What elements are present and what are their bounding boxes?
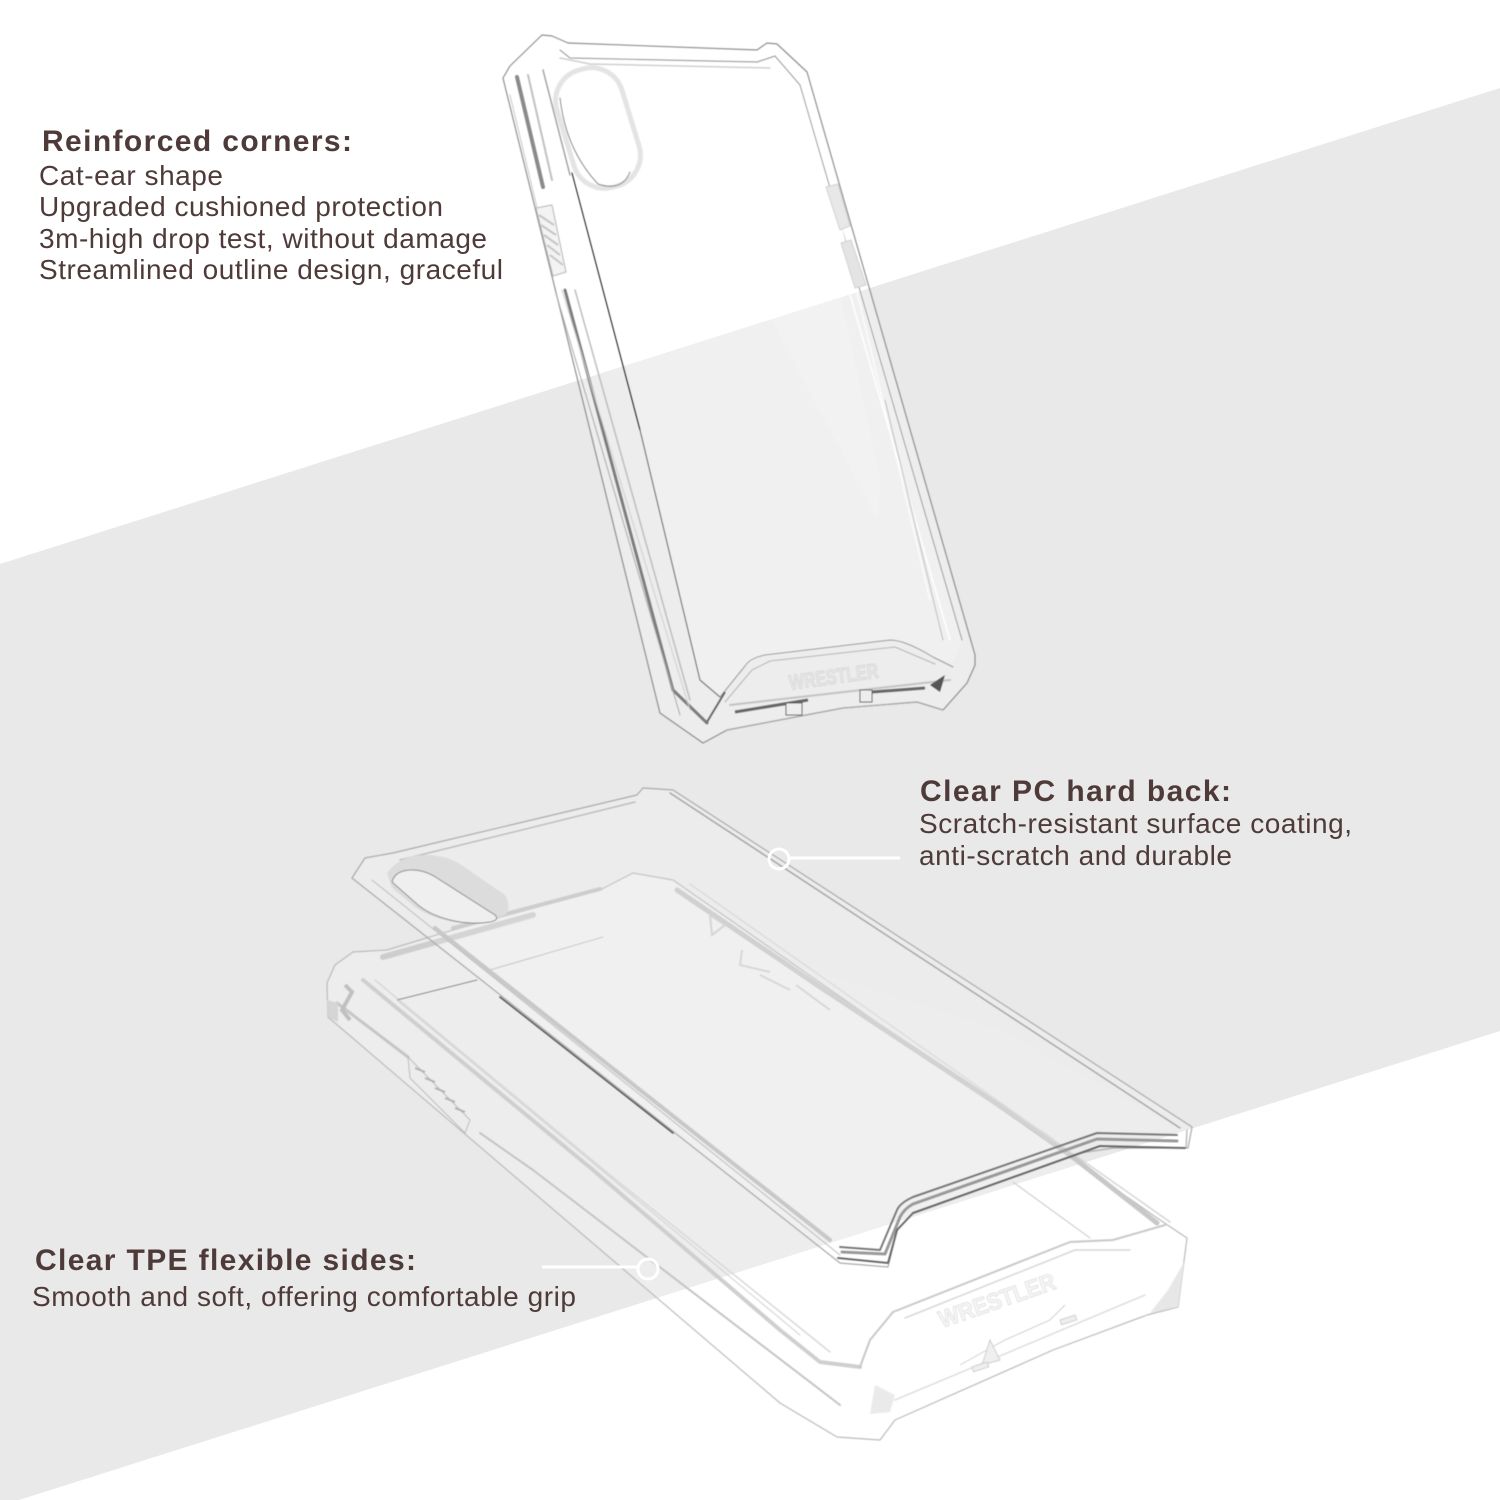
side buttons [536,184,866,288]
top rail and side rails [337,884,1170,1405]
frame outline [327,873,1187,1440]
feature list [39,160,503,285]
clear PC hard back: exploded upper layer [352,788,1192,1267]
side rails [510,50,962,730]
diagonal reflection [770,295,880,520]
heading: Reinforced corners: [42,125,352,158]
bottom ports [960,1305,1077,1372]
case body outline [503,35,975,743]
description: anti-scratch and durable [919,840,1232,871]
notch bands [838,1133,1185,1263]
callout: reinforced corners [39,125,503,285]
back panel [352,788,1192,1267]
callout: clear PC hard back [919,775,1352,871]
phone case: assembled top view [503,35,975,743]
camera cutout [548,60,648,196]
description: Scratch-resistant surface coating, [919,808,1352,839]
description [919,808,1352,871]
callout: clear TPE flexible sides [32,1244,576,1312]
surface sheen [500,880,1180,1250]
ridged side button [408,1057,470,1133]
heading: Clear TPE flexible sides: [35,1244,416,1277]
flexible TPE frame: exploded lower layer [327,873,1187,1440]
feature list: Streamlined outline design, graceful [39,254,503,285]
feature list: Upgraded cushioned protection [39,191,443,222]
feature list: 3m-high drop test, without damage [39,223,487,254]
embossed brand: WRESTLER [935,1268,1059,1334]
bottom ports [707,675,945,722]
description: Smooth and soft, offering comfortable grip [32,1281,576,1312]
inner volume buttons [710,915,830,1010]
edge lines [372,793,1187,1255]
corner detail [327,985,1184,1414]
pointer: TPE sides [542,1259,658,1279]
inner window [556,62,962,697]
feature list: Cat-ear shape [39,160,223,191]
camera cutout [387,855,508,923]
heading: Clear PC hard back: [920,775,1231,808]
embossed brand: WRESTLER [787,660,880,695]
pointer: PC back [769,849,900,869]
